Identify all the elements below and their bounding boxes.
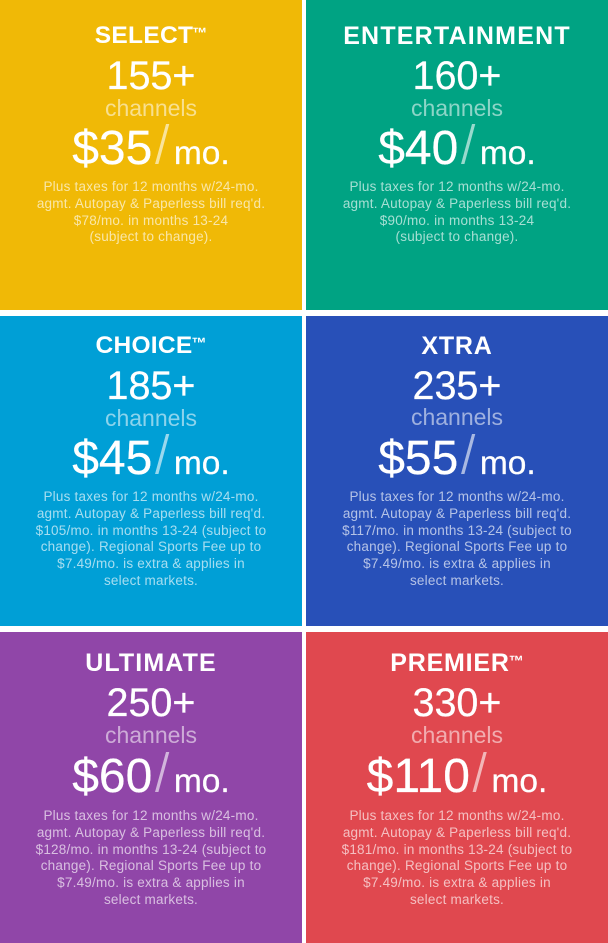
fine print: $7.49/mo. is extra & applies in xyxy=(363,875,551,890)
price: $60 per month: $60/mo. xyxy=(72,741,230,804)
fine print: $7.49/mo. is extra & applies in xyxy=(57,875,245,890)
price: $45 per month: $45/mo. xyxy=(72,423,230,486)
heading: Ultimate: ULTIMATE xyxy=(85,649,217,677)
fine print: $105/mo. in months 13-24 (subject to xyxy=(36,522,266,538)
fine print: change). Regional Sports Fee up to xyxy=(347,539,567,554)
fine print: change). Regional Sports Fee up to xyxy=(41,858,261,873)
panel: Xtra package xyxy=(306,316,608,626)
fine print: $90/mo. in months 13-24 xyxy=(380,212,534,228)
fine print: change). Regional Sports Fee up to xyxy=(347,858,567,873)
fine print xyxy=(342,489,572,588)
label: channels: channels xyxy=(105,95,197,121)
fine print: select markets. xyxy=(410,573,504,588)
fine print: (subject to change). xyxy=(396,229,518,244)
fine print: agmt. Autopay & Paperless bill req'd. xyxy=(37,196,265,211)
panel: Premier package xyxy=(306,632,608,943)
price: $35 per month: $35/mo. xyxy=(72,113,230,176)
channel count: 250+: 250+ xyxy=(106,681,195,725)
fine print xyxy=(37,179,265,244)
fine print: Plus taxes for 12 months w/24-mo. xyxy=(349,179,565,194)
fine print xyxy=(342,808,572,907)
fine print xyxy=(36,489,266,588)
label: channels: channels xyxy=(105,405,197,431)
channel count: 235+: 235+ xyxy=(412,364,501,408)
fine print: $128/mo. in months 13-24 (subject to xyxy=(36,842,266,856)
fine print: agmt. Autopay & Paperless bill req'd. xyxy=(37,506,265,521)
label: channels: channels xyxy=(411,95,503,121)
fine print: Plus taxes for 12 months w/24-mo. xyxy=(43,179,259,194)
panel: Entertainment package xyxy=(306,0,608,310)
panel: Ultimate package xyxy=(0,632,302,943)
fine print: $7.49/mo. is extra & applies in xyxy=(363,556,551,571)
price: $110 per month: $110/mo. xyxy=(367,741,547,804)
heading: Select: SELECT™ xyxy=(95,22,207,49)
fine print: Plus taxes for 12 months w/24-mo. xyxy=(43,489,259,504)
channel count: 160+: 160+ xyxy=(412,54,501,98)
label: channels: channels xyxy=(411,404,503,430)
channel count: 185+: 185+ xyxy=(106,364,195,408)
panel: Choice package xyxy=(0,316,302,626)
fine print: Plus taxes for 12 months w/24-mo. xyxy=(349,808,565,823)
fine print: $78/mo. in months 13-24 xyxy=(74,212,228,228)
heading: Choice: CHOICE™ xyxy=(95,332,207,359)
fine print: select markets. xyxy=(104,573,198,588)
fine print: $7.49/mo. is extra & applies in xyxy=(57,556,245,571)
fine print xyxy=(343,179,571,244)
fine print: Plus taxes for 12 months w/24-mo. xyxy=(349,489,565,504)
fine print xyxy=(36,808,266,907)
fine print: agmt. Autopay & Paperless bill req'd. xyxy=(343,506,571,521)
price: $40 per month: $40/mo. xyxy=(378,113,536,176)
fine print: select markets. xyxy=(410,892,504,907)
fine print: $117/mo. in months 13-24 (subject to xyxy=(342,522,572,538)
fine print: agmt. Autopay & Paperless bill req'd. xyxy=(343,825,571,840)
channel count: 155+: 155+ xyxy=(106,54,195,98)
fine print: agmt. Autopay & Paperless bill req'd. xyxy=(37,825,265,840)
price: $55 per month: $55/mo. xyxy=(378,423,536,486)
fine print: change). Regional Sports Fee up to xyxy=(41,539,261,554)
heading: Entertainment: ENTERTAINMENT xyxy=(343,22,571,50)
heading: Xtra: XTRA xyxy=(421,332,493,360)
fine print: agmt. Autopay & Paperless bill req'd. xyxy=(343,196,571,211)
fine print: $181/mo. in months 13-24 (subject to xyxy=(342,842,572,856)
heading: Premier: PREMIER™ xyxy=(390,649,524,677)
channel count: 330+: 330+ xyxy=(412,681,501,725)
label: channels: channels xyxy=(105,722,197,748)
fine print: select markets. xyxy=(104,892,198,907)
fine print: (subject to change). xyxy=(90,229,212,244)
label: channels: channels xyxy=(411,722,503,748)
panel: Select package xyxy=(0,0,302,310)
fine print: Plus taxes for 12 months w/24-mo. xyxy=(43,808,259,823)
